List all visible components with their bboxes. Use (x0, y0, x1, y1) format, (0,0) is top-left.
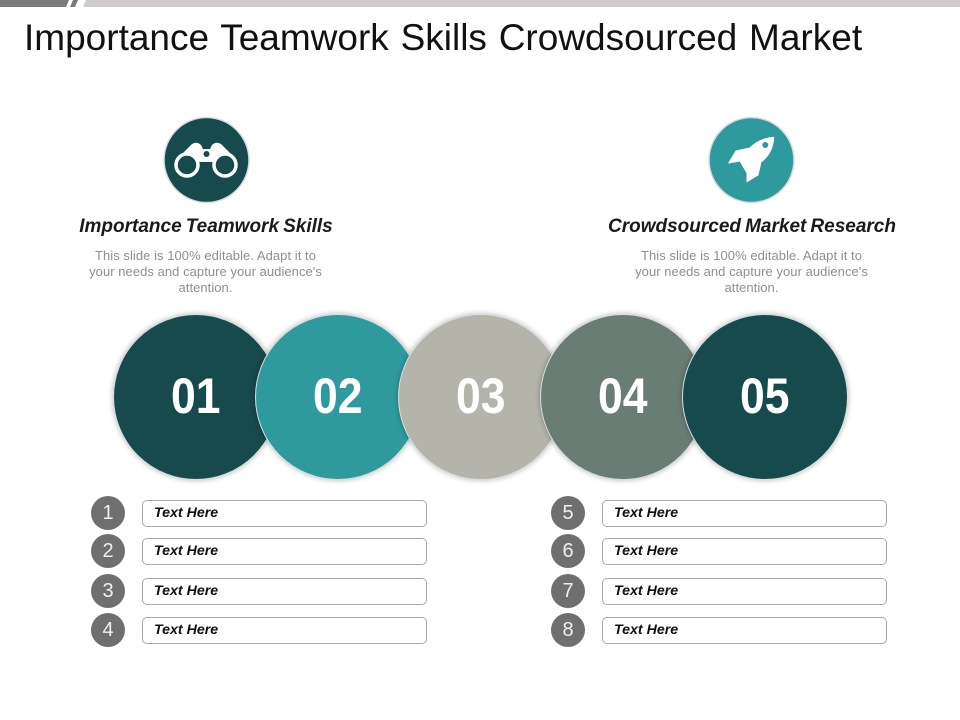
text block: right: your needs and capture your audience's (635, 264, 868, 279)
heading: right: Crowdsourced Market Research (608, 216, 896, 237)
label 6 (602, 538, 887, 565)
label 5: Text Here (614, 505, 678, 521)
text block: left: This slide is 100% editable. Adapt it to (95, 248, 316, 263)
icon: binoculars (163, 116, 250, 204)
circle 01 (113, 314, 279, 480)
text block: right: attention. (724, 280, 778, 295)
label 1 (142, 500, 427, 527)
text block: right (635, 248, 868, 295)
badge 1: 1 (102, 502, 114, 524)
badge 2: 2 (102, 540, 114, 562)
text block: left: attention. (178, 280, 232, 295)
heading: left: Importance Teamwork Skills (79, 216, 333, 237)
label 7: Text Here (614, 583, 678, 599)
circle 04 (540, 314, 706, 480)
label 4 (142, 617, 427, 644)
label 2: Text Here (154, 543, 218, 559)
text block: right: This slide is 100% editable. Adapt it to (641, 248, 862, 263)
label 4: Text Here (154, 622, 218, 638)
circle 03: 03 (456, 368, 506, 424)
circle 02 (255, 314, 421, 480)
badge 1 (91, 496, 125, 530)
badge 8 (551, 613, 585, 647)
circle 05 (682, 314, 848, 480)
label 3 (142, 578, 427, 605)
label 2 (142, 538, 427, 565)
badge 4 (91, 613, 125, 647)
label 5 (602, 500, 887, 527)
badge 6: 6 (562, 540, 574, 562)
circle 05: 05 (740, 368, 790, 424)
text block: left (89, 248, 322, 295)
circle 04: 04 (598, 368, 648, 424)
label 8 (602, 617, 887, 644)
label 7 (602, 578, 887, 605)
label 3: Text Here (154, 583, 218, 599)
title: Importance Teamwork Skills Crowdsourced Market (24, 17, 862, 58)
badge 7 (551, 574, 585, 608)
badge 6 (551, 534, 585, 568)
badge 3: 3 (102, 580, 114, 602)
circle 02: 02 (313, 368, 363, 424)
badge 5: 5 (562, 502, 574, 524)
top bar (0, 0, 960, 7)
label 8: Text Here (614, 622, 678, 638)
badge 5 (551, 496, 585, 530)
circle 01: 01 (171, 368, 221, 424)
circle 03 (398, 314, 564, 480)
badge 4: 4 (102, 619, 114, 641)
badge 7: 7 (562, 580, 574, 602)
label 1: Text Here (154, 505, 218, 521)
text block: left: your needs and capture your audience's (89, 264, 322, 279)
icon: rocket (708, 116, 795, 204)
badge 2 (91, 534, 125, 568)
badge 8: 8 (562, 619, 574, 641)
badge 3 (91, 574, 125, 608)
label 6: Text Here (614, 543, 678, 559)
